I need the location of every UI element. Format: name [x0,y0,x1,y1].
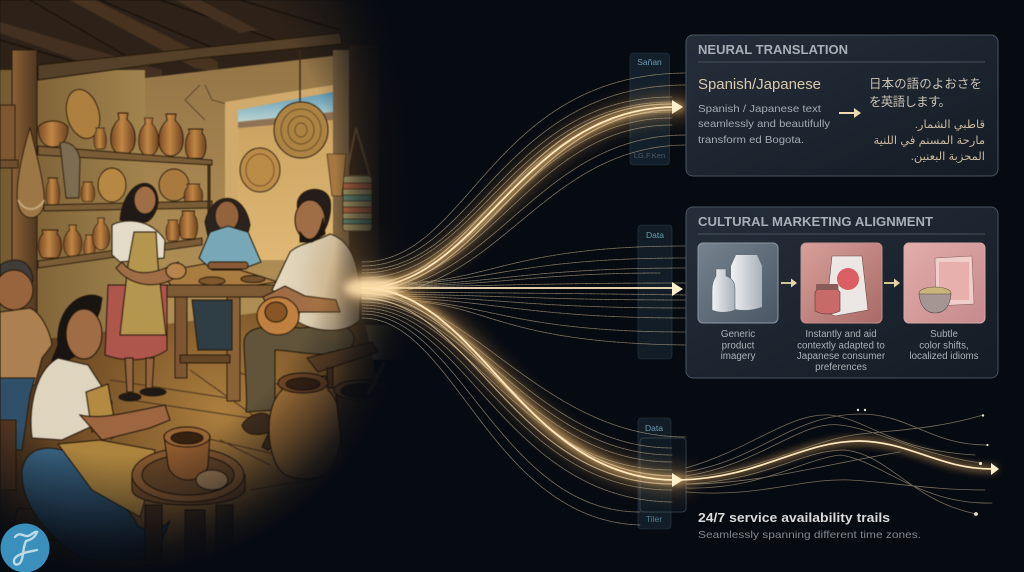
pottery wheel and pot [132,427,245,560]
right wall and post [333,45,425,330]
arrowhead: bottom flow [672,473,683,487]
heading: cultural marketing alignment: CULTURAL MARKETING ALIGNMENT [698,214,933,229]
side tag: Data middle: Data [646,230,664,240]
image captions: product [722,340,755,352]
side tag: Data and Tiler: Data [645,423,663,433]
side tag: Data and Tiler: Tiler [646,514,662,524]
Arabic text [873,119,985,164]
arrowhead: trail end [991,463,999,475]
arrowhead: middle flow [672,282,683,296]
stool under woman [10,508,80,540]
workshop ceiling [0,0,425,85]
seated woman at pottery wheel [22,295,170,560]
ceiling main beam [38,33,342,80]
large clay jar [269,373,341,479]
left post [12,50,37,330]
image: localized product box [904,243,985,323]
source glow [344,277,400,299]
hanging basket [274,50,328,158]
light flow: bottom bundle [362,288,686,525]
heading: neural translation: NEURAL TRANSLATION [698,42,848,57]
image captions: Subtle [930,329,958,340]
availability caption: Seamlessly spanning different time zones. [698,529,921,541]
old man at left [0,260,52,490]
Japanese text [869,77,982,109]
side tag: Sañan [630,53,670,165]
vignette fade [0,0,525,572]
woman in blue shirt [192,198,261,350]
logo badge [0,524,50,572]
hanging rope loop [17,128,44,218]
side tag: Sañan: LG.F.Ken [634,151,665,160]
flow spotlight on scene [290,210,440,370]
second jar with spoon [334,362,388,475]
image captions [721,329,979,373]
Arabic text: قاطبي الشمار. [915,119,985,132]
description text [698,103,831,146]
Japanese text: 日本の語のよおさを [869,77,982,91]
back walls [0,45,425,360]
image: generic milk products [698,243,778,323]
availability trails [680,414,994,514]
image captions: preferences [815,362,867,373]
table [160,262,278,401]
arrow [781,278,797,288]
Japanese text: を英語します。 [869,95,951,109]
side tag: Data and Tiler [638,418,686,529]
wall plate [240,148,280,192]
sub heading: Spanish/Japanese [698,76,821,93]
description text: Spanish / Japanese text [698,103,821,115]
Arabic text: مارحة المسنم في اللنية [873,135,985,148]
panel: neural translation [686,35,998,176]
description text: transform ed Bogota. [698,134,804,146]
image captions: contextly adapted to [797,340,885,352]
arrow [839,108,861,118]
shelves with pots [0,86,212,268]
availability caption: 24/7 service availability trails [698,510,890,525]
image captions: localized idioms [909,351,979,362]
availability caption [698,510,921,541]
striped bag and hanging pot [327,128,372,231]
trail end dots [857,409,989,516]
light flow: top bundle [362,73,686,296]
window with outdoor view [225,85,333,260]
side tag: Data middle [638,225,672,359]
image captions: Instantly and aid [805,329,877,340]
potter man with white shirt [242,189,378,450]
light flow: middle bundle [362,246,686,345]
image captions: imagery [721,351,756,362]
Arabic text: المحزبة البعنين. [911,151,985,164]
image captions: color shifts, [919,340,969,352]
arrowhead: top flow [672,100,683,114]
image captions: Japanese consumer [797,351,886,362]
arrow [884,278,900,288]
standing woman [105,183,186,401]
side tag: Sañan: Sañan [637,57,662,67]
description text: seamlessly and beautifully [698,118,831,130]
panel: cultural marketing alignment [686,207,998,378]
illustration: pottery workshop [0,0,425,572]
floor with tiles [0,300,420,572]
image: adapted Japanese packaging [801,243,882,323]
image captions: Generic [721,329,755,340]
